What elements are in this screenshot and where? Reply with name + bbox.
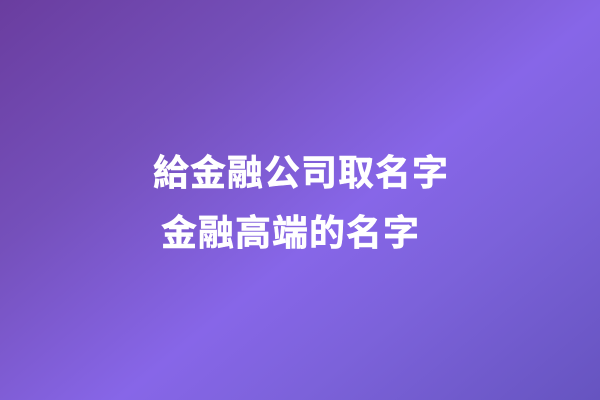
title line 2: 金融高端的名字 xyxy=(161,212,420,253)
title line 1: 給金融公司取名字 xyxy=(153,152,449,193)
